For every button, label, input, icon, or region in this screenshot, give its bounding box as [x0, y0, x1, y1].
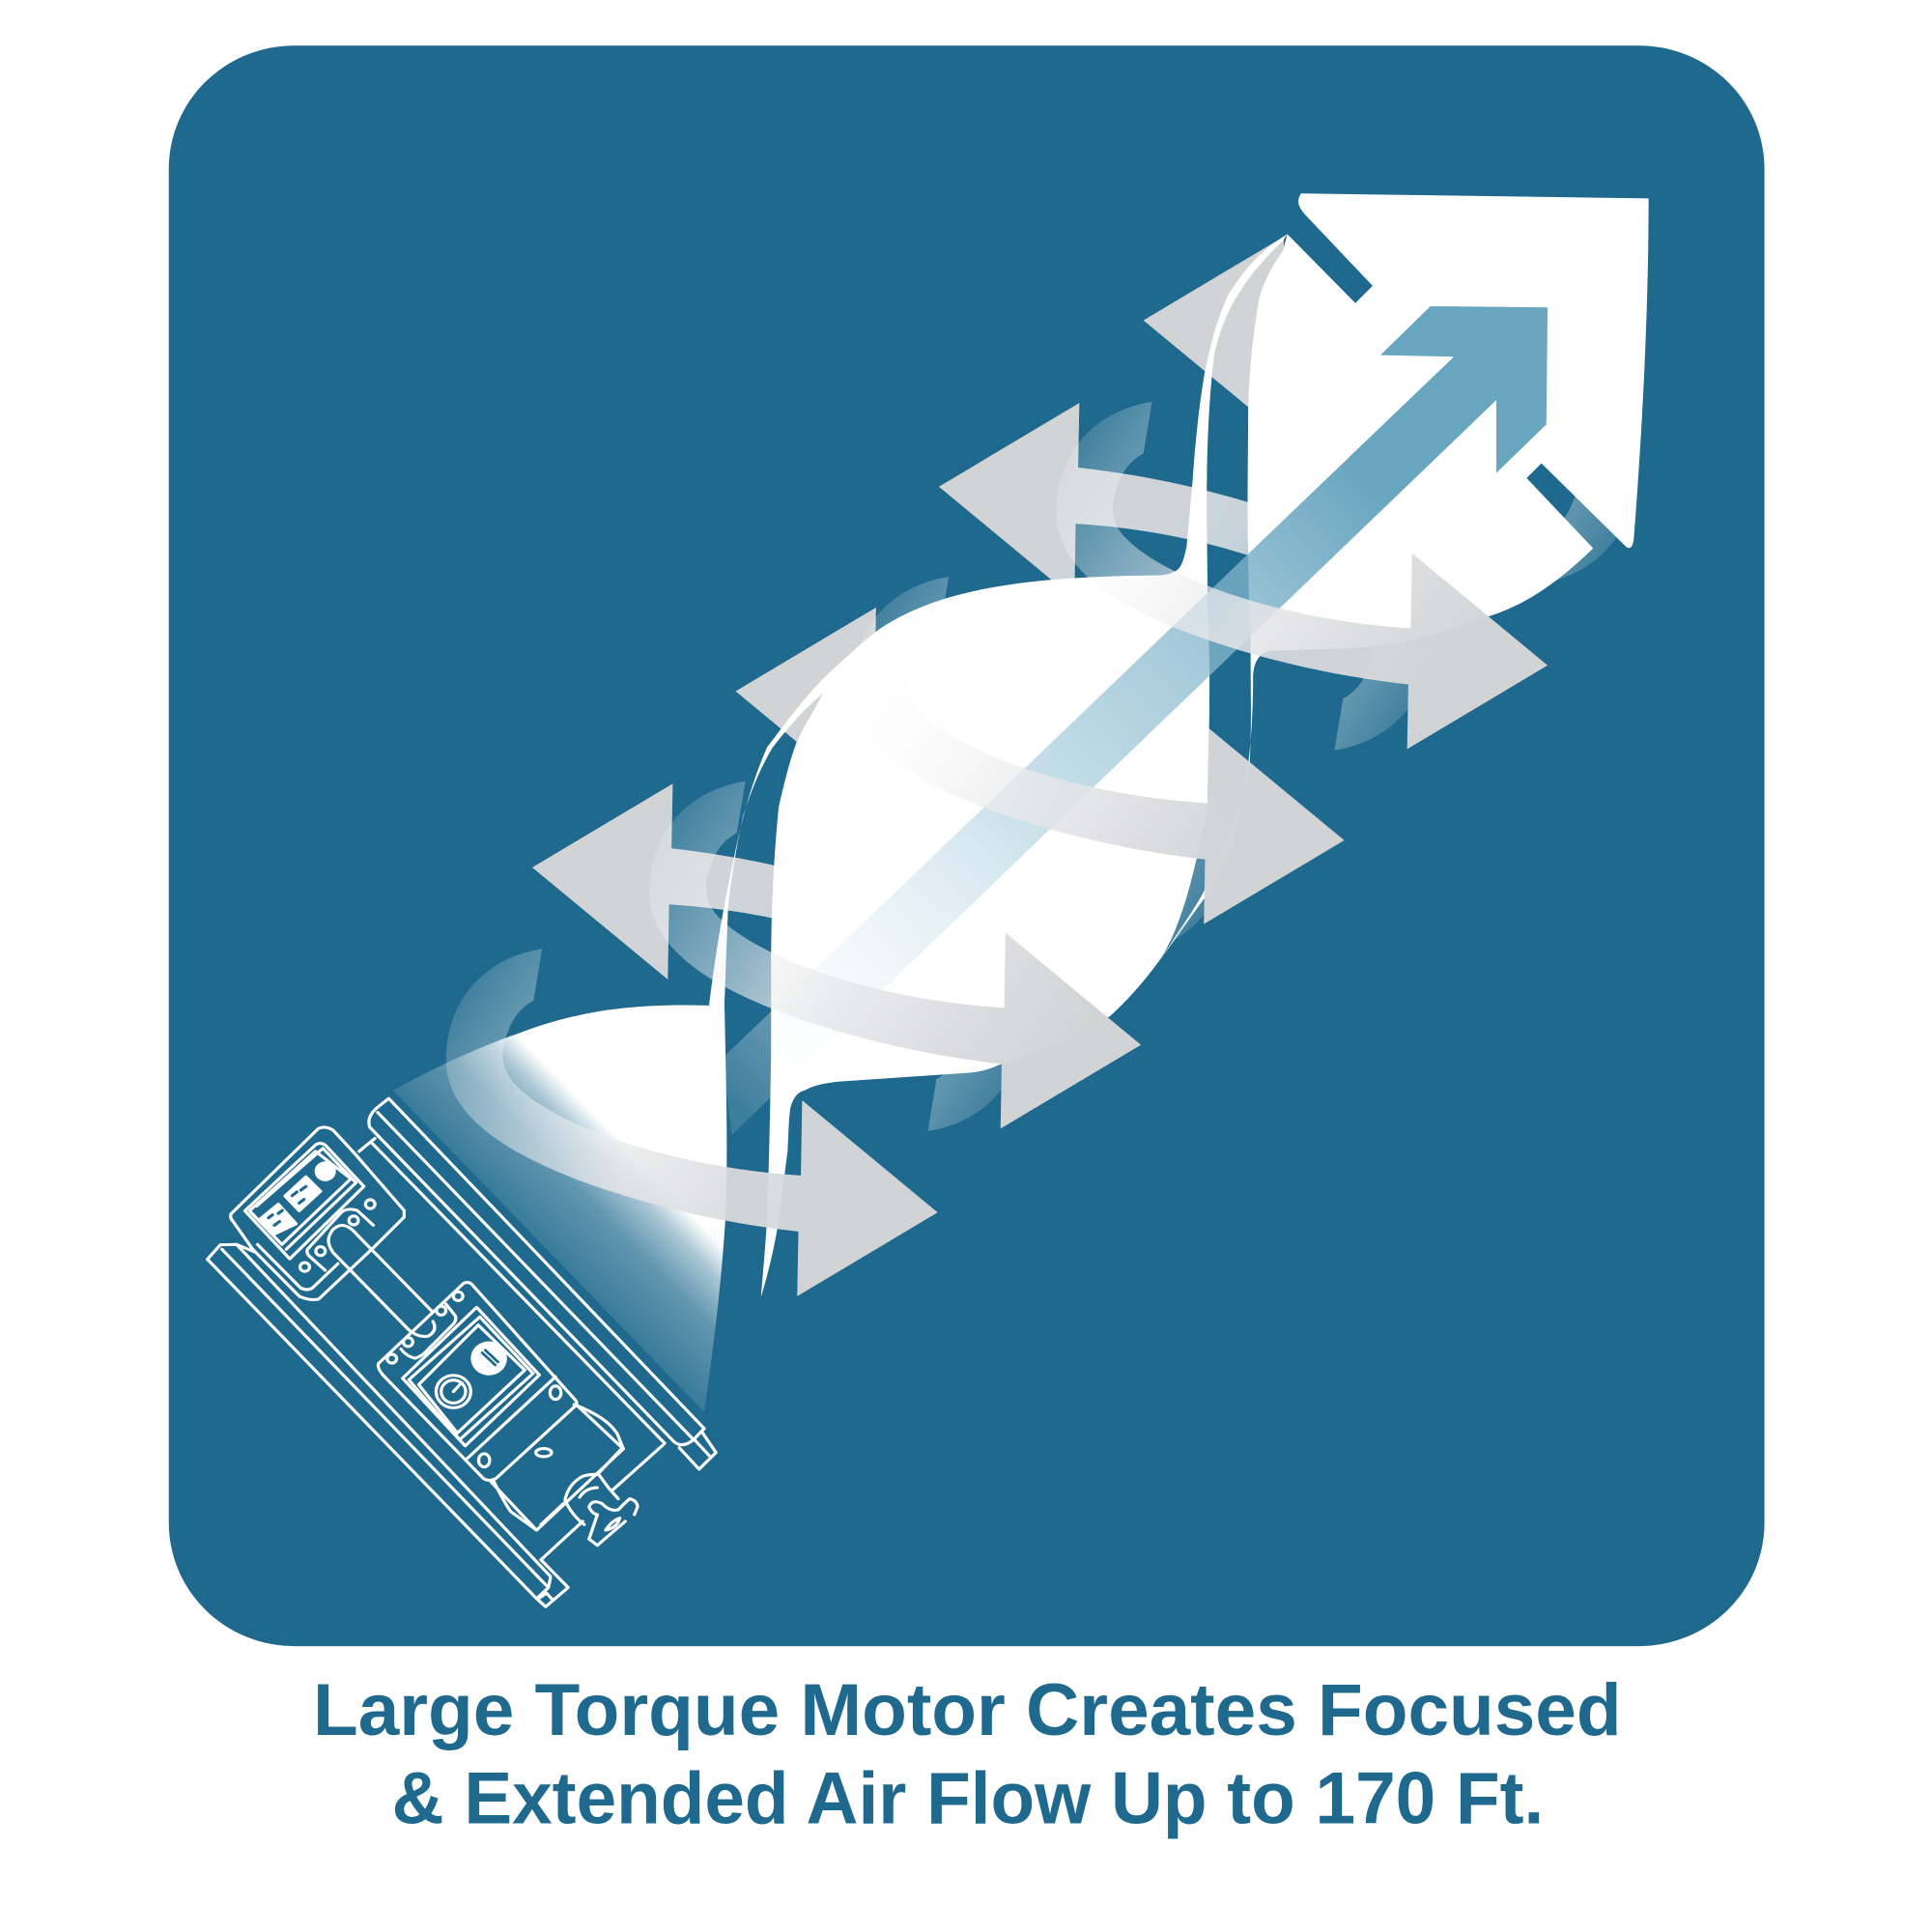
caption line 2: & Extended Air Flow Up to 170 Ft.	[392, 1758, 1544, 1840]
swirl arrow: right 3	[853, 577, 1345, 924]
swirl arrow: right 2	[649, 781, 1141, 1128]
outlet sockets	[261, 1177, 321, 1234]
right-pointing swirl arrows over the ribbon	[446, 402, 1548, 1296]
motor body	[492, 1405, 623, 1530]
swirl arrow: left 3	[939, 403, 1431, 751]
upper rail	[369, 1098, 716, 1469]
power knob	[436, 1376, 470, 1407]
swirl arrow: right 1	[446, 949, 938, 1296]
air flow beam from the motor	[393, 1003, 726, 1412]
central blue diagonal arrow	[722, 306, 1548, 1135]
panel: blue rounded background	[169, 45, 1765, 1646]
caption heading	[313, 1669, 1622, 1840]
white air ribbon: middle twist and thin strands	[709, 234, 1288, 1297]
wing nut	[565, 1474, 638, 1546]
lower rail	[208, 1244, 568, 1606]
swirl arrow: left 4	[1144, 237, 1635, 584]
caption line 1: Large Torque Motor Creates Focused	[313, 1669, 1622, 1751]
swirl arrow: right 4	[1056, 402, 1548, 750]
display module	[231, 1127, 404, 1299]
handle	[328, 1225, 435, 1337]
swirl arrow: left 2	[735, 608, 1227, 955]
switch module	[378, 1283, 577, 1480]
swirl arrow: left 1	[532, 783, 1024, 1131]
fan speed knob	[470, 1342, 507, 1376]
crossbars	[359, 1138, 663, 1560]
icon: air mover line drawing	[208, 1098, 716, 1606]
left-pointing swirl arrows behind the air ribbon	[532, 237, 1635, 1131]
white air ribbon: top blade with arrow head	[1162, 193, 1649, 957]
